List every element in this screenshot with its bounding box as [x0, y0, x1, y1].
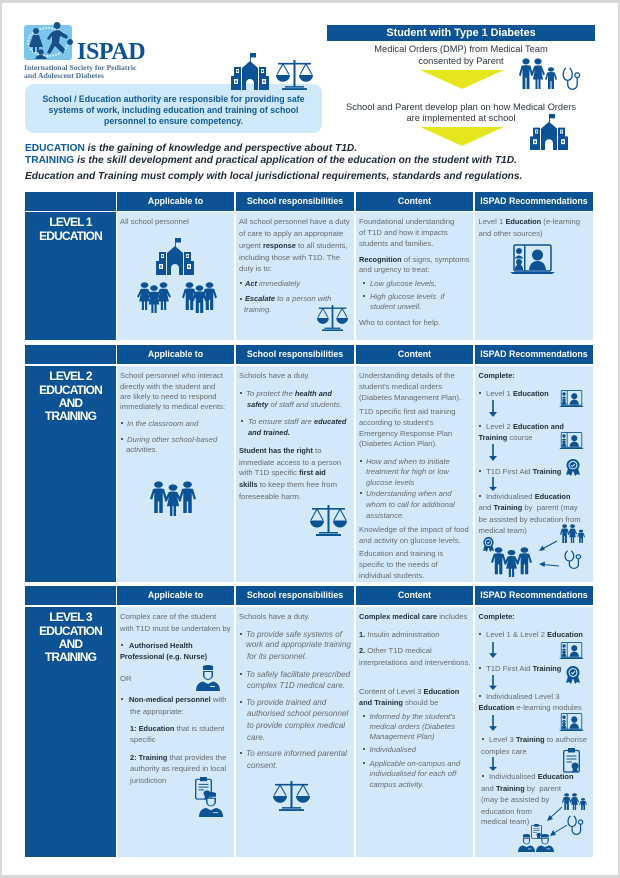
text: school and parent plan: are implemented at school: [406, 113, 516, 123]
text block: Level 2 Education and: [486, 422, 564, 430]
arrow: stethoscope to staff: [539, 562, 559, 567]
text block: [356, 607, 473, 790]
header: applicable to: [117, 192, 234, 211]
logo: ISPAD: [24, 22, 145, 80]
text block: Schools have a duty.: [239, 370, 310, 380]
text block: consent.: [247, 760, 278, 770]
text block: In the classroom and: [127, 418, 198, 428]
text block: To safely facilitate prescribed: [246, 670, 350, 678]
level 2 header row: [25, 345, 593, 364]
text block: student unwell.: [370, 302, 421, 311]
header: applicable to: [117, 345, 234, 364]
panel: level 2 content: [356, 366, 473, 582]
text block: and activity on glucose levels.: [359, 536, 461, 544]
panel: level 1 recommendations: [475, 212, 593, 340]
text block: To ensure informed parental: [246, 748, 347, 758]
arrow: yellow triangle 1: [420, 70, 504, 89]
icon: scale of justice: [276, 60, 313, 90]
icon: scale: [317, 305, 348, 331]
text block: directly with the student and: [120, 382, 215, 390]
arrow: family to staff: [539, 540, 558, 551]
text block: Content of Level 3 Education: [359, 686, 459, 696]
text block: Who to contact for help.: [359, 318, 440, 326]
text block: All school personnel have a duty: [239, 217, 350, 226]
header: content: Content: [398, 349, 431, 359]
definition: training: TRAINING is the skill development and practical application of the education on the student with T1D.: [25, 155, 517, 166]
icon: family: [519, 58, 557, 89]
text block: specific: [130, 734, 156, 744]
panel: level 3 recommendations: [475, 607, 593, 857]
text block: [475, 607, 593, 827]
icon: stethoscope: [567, 815, 584, 835]
text block: (may be assisted by: [481, 795, 549, 804]
level 2 label: LEVEL 2: [49, 368, 92, 382]
panel: level 1 applicable to: All school personnel: [120, 217, 189, 226]
text block: T1D First Aid Training: [486, 466, 561, 476]
definition: compliance: Education and Training must comply with local jurisdictional requirements, standards and regulations.: [25, 171, 522, 182]
arrow down: [489, 444, 497, 461]
text block: Complex care of the student: [120, 612, 216, 621]
level 3 label: TRAINING: [45, 650, 96, 664]
text block: Complete:: [478, 612, 515, 621]
text block: Escalate to a person with: [245, 294, 331, 303]
banner: student with type 1 diabetes: [327, 25, 595, 41]
text block: with T1D must be undertaken by: [120, 624, 231, 633]
text block: Professional (e.g. Nurse): [120, 652, 207, 661]
text block: of T1D and how it impacts: [359, 228, 448, 237]
level 3 label: AND: [59, 636, 82, 650]
level 3 label: [25, 607, 116, 857]
text block: work and appropriate training: [246, 640, 351, 649]
text block: 1. Insulin administration: [359, 630, 440, 638]
text: school and parent plan: [346, 102, 576, 123]
text block: and other sources): [478, 229, 543, 238]
text block: [478, 370, 581, 534]
header: school responsibilities: [236, 192, 354, 211]
text: medical orders: [374, 44, 548, 66]
logo emblem: [24, 22, 73, 60]
header: school responsibilities: School responsibilities: [247, 196, 343, 206]
header: ispad recommendations: [475, 345, 593, 364]
arrow: stethoscope to staff: [549, 824, 568, 837]
icon: school: [530, 114, 568, 150]
text block: [239, 370, 346, 500]
text block: [239, 217, 350, 314]
text block: [478, 217, 580, 238]
text block: immediately to medical events:: [120, 402, 225, 411]
text block: of care to apply an appropriate: [239, 228, 343, 238]
icon: certified person: [195, 777, 223, 817]
arrow down: [489, 675, 497, 690]
text block: specific to the needs of: [359, 560, 438, 568]
text block: care.: [247, 732, 265, 742]
level 1 header row: [25, 192, 593, 211]
panel: level 2 applicable to: [117, 366, 234, 582]
text block: How and when to initiate: [366, 456, 450, 466]
header: applicable to: [117, 586, 234, 605]
text block: student's medical orders: [359, 382, 442, 390]
header: ispad recommendations: [475, 586, 593, 605]
text block: Applicable on-campus and: [370, 758, 460, 768]
header: ispad recommendations: ISPAD Recommendations: [480, 349, 588, 359]
header: ispad recommendations: ISPAD Recommendations: [480, 196, 588, 206]
text block: Foundational understanding: [359, 217, 454, 226]
text block: Informed by the student's: [370, 712, 456, 720]
text block: During other school-based: [127, 435, 217, 444]
text block: [359, 217, 470, 326]
level 2 label: [25, 366, 116, 582]
header: school responsibilities: [236, 586, 354, 605]
text block: assistance.: [366, 510, 404, 520]
panel: level 3 responsibilities: [236, 607, 354, 857]
text block: and Training should be: [359, 698, 438, 706]
header: ispad recommendations: ISPAD Recommendations: [480, 590, 588, 600]
header: content: Content: [398, 590, 431, 600]
text block: (Diabetes Action Plan).: [359, 439, 437, 448]
text block: Emergency Response Plan: [359, 428, 452, 438]
icon: scale: [273, 781, 310, 811]
icon: medal: [566, 459, 580, 476]
text block: To provide safe systems of: [246, 630, 342, 638]
text block: the appropriate:: [130, 706, 184, 716]
text block: Education and training is: [359, 548, 443, 558]
icon: school: [231, 53, 269, 90]
icon: nurse: [196, 665, 220, 691]
arrow: family to staff: [546, 806, 563, 822]
text block: according to student's: [359, 418, 434, 426]
text block: safety of staff and students.: [247, 400, 342, 409]
text block: treatment for high or low: [366, 467, 449, 476]
text block: 2. Other T1D medical: [359, 646, 432, 655]
text block: complex T1D medical care.: [247, 680, 345, 690]
text block: 1: Education that is student: [130, 724, 224, 732]
text block: Complete:: [478, 370, 515, 380]
text block: be assisted by education from: [478, 514, 581, 524]
banner: student with type 1 diabetes: Student with Type 1 Diabetes: [386, 27, 536, 39]
panel: level 2 recommendations: [475, 366, 593, 582]
arrow down: [489, 757, 497, 771]
text block: Training course: [478, 432, 532, 442]
level 1 label: [25, 212, 116, 340]
callout: school authority responsibility: [25, 84, 322, 133]
logo subtitle: and Adolescent Diabetes: [24, 71, 104, 80]
text block: [117, 607, 234, 787]
header: content: [356, 192, 473, 211]
text block: Non-medical personnel with: [129, 694, 227, 704]
text block: authority as required in local: [130, 764, 226, 772]
level 2 label: TRAINING: [45, 408, 96, 422]
text block: campus activity.: [370, 780, 424, 788]
icon: clipboard: [563, 748, 580, 773]
arrow down: [489, 477, 497, 491]
callout: school authority responsibility: School / Education authority are responsible for providing safe: [42, 94, 305, 104]
text block: [236, 607, 354, 771]
panel: level 1 responsibilities: [236, 212, 354, 340]
level 3 label: EDUCATION: [39, 624, 102, 638]
text block: T1D specific first aid training: [359, 406, 456, 416]
text block: authorised school personnel: [247, 709, 348, 718]
text block: Management Plan): [370, 732, 434, 740]
level 1 label: LEVEL 1: [49, 214, 92, 228]
text block: Student has the right to: [239, 446, 321, 454]
text block: To provide trained and: [246, 698, 326, 706]
text: medical orders: Medical Orders (DMP) from Medical Team: [374, 44, 548, 54]
icon: school: [156, 238, 194, 275]
icon: e-learning: [559, 713, 584, 731]
logo subtitle: International Society for Pediatric: [24, 63, 136, 72]
header: applicable to: Applicable to: [148, 349, 203, 359]
header: applicable to: Applicable to: [148, 590, 203, 600]
text block: Recognition of signs, symptoms: [359, 254, 470, 264]
text block: T1D First Aid Training: [486, 664, 561, 672]
text block: medical orders (Diabetes: [370, 722, 455, 731]
text block: activities.: [126, 445, 158, 454]
text block: for its personnel.: [247, 652, 307, 660]
text block: To protect the health and: [246, 388, 332, 398]
icon: family: [150, 481, 196, 516]
icon: e-learning: [559, 432, 584, 449]
text block: foreseeable harm.: [239, 492, 301, 500]
header: school responsibilities: School responsibilities: [247, 349, 343, 359]
text block: [359, 370, 469, 580]
text block: Knowledge of the impact of food: [359, 524, 469, 534]
text block: education from: [481, 806, 532, 816]
level 2 label: AND: [59, 396, 82, 410]
text block: medical team): [481, 816, 529, 826]
level 3 label: LEVEL 3: [49, 610, 92, 624]
text block: immediate access to a person: [239, 458, 341, 466]
text block: jurisdiction: [130, 776, 166, 784]
icon: stethoscope: [562, 68, 580, 90]
text block: Understanding when and: [366, 488, 451, 498]
icon: medal: [566, 666, 580, 684]
text: medical orders: consented by Parent: [418, 56, 504, 66]
text block: Understanding details of the: [359, 370, 455, 380]
text block: and urgency to treat:: [359, 265, 430, 274]
icon: family: [562, 793, 587, 810]
text block: are likely to need to respond: [120, 392, 217, 400]
panel: level 1 applicable to: [117, 212, 234, 340]
text block: Level 1 Education: [486, 388, 549, 398]
icon: men group: [182, 282, 217, 313]
text block: Low glucose levels,: [370, 278, 437, 288]
text block: and Training by parent: [481, 784, 561, 792]
icon: stethoscope: [564, 550, 582, 569]
callout: school authority responsibility: personnel to ensure competency.: [104, 116, 243, 126]
arrow: yellow triangle 2: [420, 127, 504, 146]
text block: urgent response to all students,: [239, 240, 348, 250]
level 3 header row: [25, 586, 594, 606]
text block: Individualised: [370, 745, 416, 754]
icon: nurse and carer with clipboard: [518, 824, 554, 852]
text block: Level 1 Education (e-learning: [478, 217, 580, 226]
text block: Education e-learning modules: [478, 702, 582, 712]
logo subtitle: [24, 63, 136, 80]
panel: level 3 applicable to: [117, 607, 234, 857]
icon: medal: [483, 537, 494, 552]
panel: level 2 responsibilities: [236, 366, 354, 582]
text block: Authorised Health: [129, 640, 193, 650]
text block: School personnel who interact: [120, 370, 223, 380]
text block: complex care: [481, 746, 527, 756]
icon: scale: [310, 505, 347, 536]
icon: e-learning: [510, 244, 555, 274]
panel: level 3 content: [356, 607, 473, 857]
text block: to provide complex medical: [247, 720, 345, 730]
text block: [120, 370, 225, 454]
text block: with T1D specific first aid: [239, 468, 326, 477]
definition: education: EDUCATION is the gaining of knowledge and perspective about T1D.: [25, 143, 357, 154]
header: content: [356, 586, 473, 605]
text block: Act immediately: [245, 278, 300, 288]
text block: training.: [244, 305, 271, 314]
icon: e-learning: [559, 642, 584, 659]
text block: Complex medical care includes: [359, 612, 467, 621]
logo wordmark: ISPAD: [77, 38, 145, 64]
text block: Level 3 Training to authorise: [489, 734, 587, 744]
header: school responsibilities: [236, 345, 354, 364]
text block: Individualised Education: [489, 772, 573, 780]
text block: including those with T1D. The: [239, 252, 340, 262]
text block: duty is to:: [239, 264, 272, 272]
text: school and parent plan: School and Parent develop plan on how Medical Orders: [346, 102, 576, 112]
text block: OR: [120, 674, 132, 682]
level 2 label: EDUCATION: [39, 382, 102, 396]
header: content: Content: [398, 196, 431, 206]
text block: (Diabetes Management Plan).: [359, 393, 461, 402]
icon: family: [560, 524, 585, 543]
arrow down: [489, 642, 497, 658]
text block: medical team): [478, 526, 527, 534]
arrow down: [489, 400, 497, 417]
arrow down: [489, 715, 497, 731]
text block: glucose levels: [366, 478, 414, 486]
text block: and Training by parent (may: [478, 503, 578, 512]
header: ispad recommendations: [475, 192, 593, 211]
text block: High glucose levels if: [370, 292, 444, 300]
text block: students and families.: [359, 238, 433, 248]
icon: e-learning: [559, 390, 584, 407]
text block: To ensure staff are educated: [248, 416, 346, 426]
text block: individualised for each off: [370, 768, 456, 778]
callout: school authority responsibility: systems of work, including education and training of school: [49, 105, 298, 115]
text block: Individualised Education: [486, 492, 570, 500]
icon: trained staff: [491, 547, 532, 577]
text block: and trained.: [248, 428, 290, 437]
text block: interpretations and interventions.: [359, 658, 471, 666]
text block: skills to keep them free from: [239, 480, 337, 488]
header: applicable to: Applicable to: [148, 196, 203, 206]
text block: Individualised Level 3: [486, 692, 560, 700]
header: content: [356, 345, 473, 364]
text block: Level 1 & Level 2 Education: [486, 630, 583, 638]
text block: whom to call for additional: [366, 500, 455, 508]
text block: individual students.: [359, 571, 424, 580]
text block: Schools have a duty.: [239, 612, 310, 621]
panel: level 1 content: [356, 212, 473, 340]
icon: women group: [137, 282, 171, 313]
level 1 label: EDUCATION: [39, 228, 102, 242]
header: school responsibilities: School responsibilities: [247, 590, 343, 600]
text block: 2: Training that provides the: [130, 752, 226, 762]
